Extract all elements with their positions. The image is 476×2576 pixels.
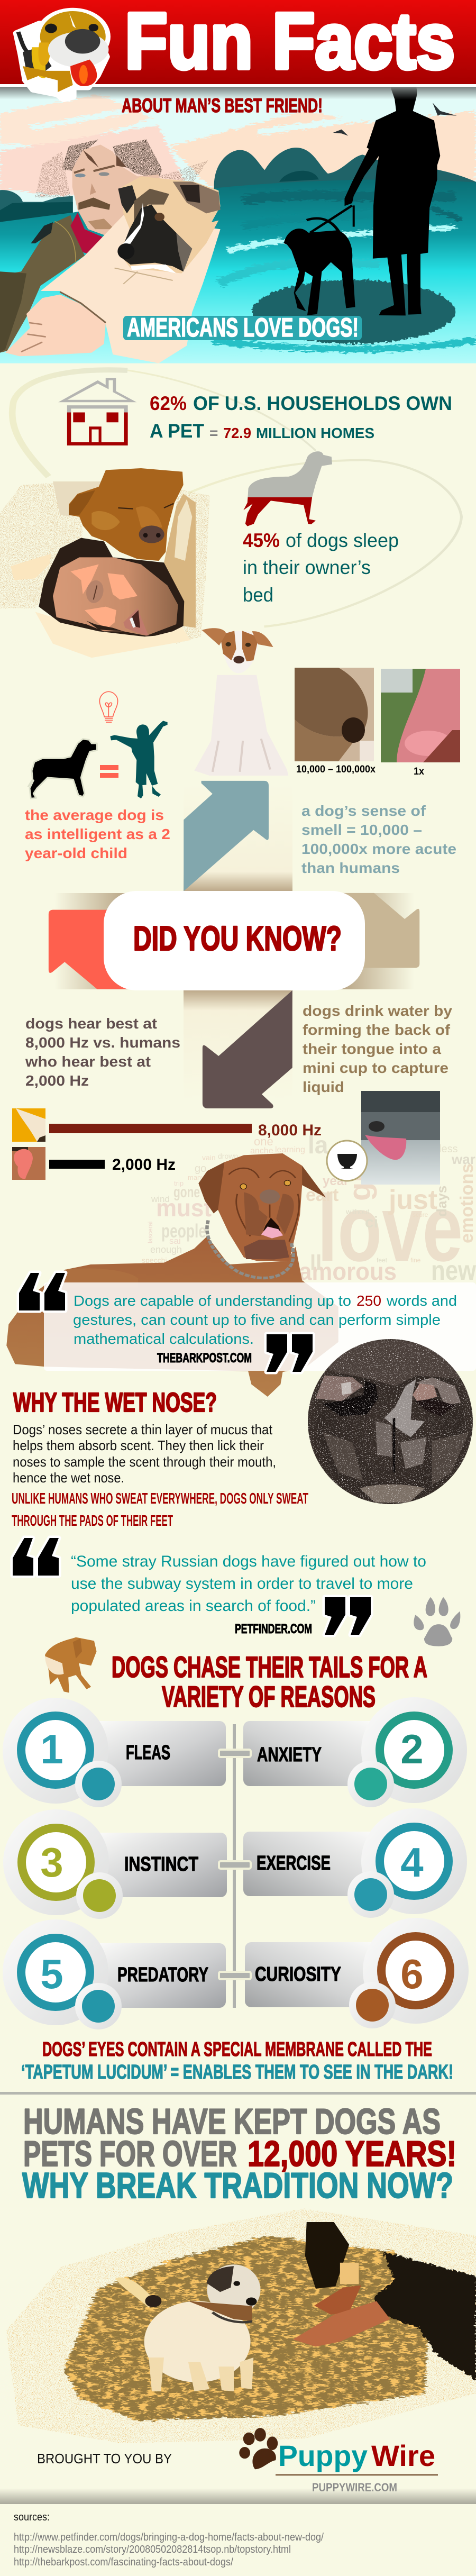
text: drinking fact: their tongue into a (303, 1041, 441, 1057)
icon: ear of dog (12, 1108, 45, 1142)
icon: bowl in circle (327, 1141, 367, 1181)
text: drinking fact: dogs drink water by (303, 1003, 452, 1019)
word cloud background: eart (306, 1185, 338, 1205)
quote text: 250 words: mathematical calculations. (74, 1331, 254, 1347)
bar: dog hearing (49, 1122, 322, 1139)
word cloud background: ll (310, 1251, 322, 1275)
logo outline (17, 11, 107, 99)
face (72, 144, 160, 238)
text: drinking fact (303, 1003, 452, 1095)
icon: house 62 percent (58, 378, 136, 445)
water (0, 179, 476, 363)
text: drinking fact: forming the back of (303, 1022, 451, 1038)
text: smell fact: than humans (301, 860, 400, 876)
heading: 12,000 years (22, 2101, 456, 2206)
word cloud background: year (323, 1174, 349, 1188)
birds (333, 103, 457, 136)
dog head (118, 176, 221, 274)
heading: 12,000 years: PETS FOR OVER (23, 2134, 237, 2174)
word cloud background: drown (218, 1152, 238, 1160)
word cloud background: many (188, 1173, 205, 1181)
source: petfinder: PETFINDER.COM (235, 1622, 312, 1636)
word cloud background: people (161, 1220, 206, 1242)
heading: dogs chase their tails (112, 1650, 427, 1713)
central connector line (233, 1724, 236, 2008)
quote text: 250 words (73, 1292, 457, 1347)
icon: human ear (12, 1147, 45, 1180)
quote text: russian dogs: “Some stray Russian dogs have figured out how to (71, 1553, 426, 1570)
bar: human hearing: 2,000 Hz (112, 1156, 176, 1173)
text: smell fact: smell = 10,000 – (301, 822, 422, 838)
text: drinking fact: mini cup to capture (303, 1060, 448, 1076)
quote text: 250 words: 250 (356, 1292, 381, 1309)
sources: sources: (14, 2511, 50, 2523)
arrow: blue up-right (184, 781, 269, 891)
pillow and sheets (53, 481, 104, 517)
arrow: coral left (49, 910, 131, 989)
photo: dog tongue and bowl (361, 1091, 440, 1185)
text: intelligence fact: year-old child (25, 845, 127, 861)
sleeping dog (69, 468, 184, 561)
reason 2: anxiety (243, 1697, 467, 1807)
text: wet nose explanation: Dogs’ noses secrete a thin layer of mucus that (13, 1422, 273, 1437)
arrow: tan right (334, 893, 419, 968)
white centre pill (104, 891, 365, 990)
word cloud background: fine (410, 1257, 421, 1264)
word cloud background: la (308, 1131, 328, 1159)
text: hearing fact (25, 1015, 180, 1089)
text: sweat fact (12, 1490, 308, 1530)
photo: dogue de bordeaux (6, 1153, 338, 1397)
text: hearing fact: dogs hear best at (25, 1015, 157, 1032)
stat: 45 percent of dogs: bed (243, 584, 273, 606)
shadow ellipse (252, 280, 455, 344)
logo: Puppy Wire: Wire (371, 2439, 435, 2472)
text: intelligence fact: as intelligent as a 2 (25, 826, 170, 842)
heading: why the wet nose: WHY THE WET NOSE? (13, 1387, 217, 1417)
text: smell fact: a dog’s sense of (301, 803, 426, 819)
bedding specks (0, 481, 210, 644)
word cloud background: sai (169, 1236, 181, 1246)
stat: 62 percent of households (150, 393, 452, 442)
did you know graphic (49, 781, 419, 1108)
hero scene (0, 78, 476, 363)
text: wet nose explanation: noses to sample the scent through their mouth, (13, 1454, 276, 1470)
quote text: russian dogs: populated areas in search of food.” (71, 1597, 316, 1615)
caption: human nose: 1x (414, 766, 424, 777)
word cloud background: war (451, 1151, 475, 1167)
cartoon beagle logo (17, 11, 108, 102)
stat: 45 percent of dogs: in their owner’s (243, 557, 371, 578)
footer shadow (0, 2488, 476, 2504)
quote text: 250 words: Dogs are capable of understanding up to (74, 1292, 351, 1309)
icon: light bulb (99, 691, 118, 722)
reason 2: anxiety: 2 (400, 1726, 424, 1772)
man's face (53, 557, 178, 636)
sources: http://newsblaze.com/story/20080502082814tsop.nb/topstory.html (14, 2544, 291, 2555)
reason 6: curiosity: CURIOSITY (255, 1963, 341, 1986)
stat: 62 percent of households: 72.9 (223, 425, 251, 441)
text: smell fact (301, 803, 456, 876)
banner: Americans love dogs: AMERICANS LOVE DOGS! (127, 313, 359, 342)
word cloud background: anche (250, 1146, 273, 1155)
reason 5: predatory: PREDATORY (117, 1964, 208, 1986)
photo: wet dog nose (307, 1339, 474, 1506)
source: thebarkpost: THEBARKPOST.COM (157, 1351, 252, 1366)
text: drinking fact: liquid (303, 1079, 344, 1095)
word cloud background: without (345, 1207, 369, 1216)
sources: http://www.petfinder.com/dogs/bringing-a-dog-home/facts-about-new-dog/ (14, 2532, 324, 2543)
word cloud background: days (434, 1186, 450, 1217)
close quote mark 1 (267, 1334, 313, 1372)
text: intelligence fact (25, 807, 170, 861)
quote text: 250 words: words and (386, 1292, 457, 1309)
reason 3: instinct (3, 1809, 227, 1919)
banner: Americans love dogs (123, 313, 362, 342)
bar: dog hearing: 8,000 Hz (258, 1122, 322, 1139)
text: hearing fact: 2,000 Hz (25, 1072, 89, 1089)
decorative swoosh curves (12, 370, 461, 626)
hand (5, 295, 106, 356)
translucent quote panel (44, 1282, 476, 1371)
dog chest (41, 215, 221, 363)
text: intelligence fact: the average dog is (25, 807, 164, 823)
panel shadows (54, 783, 414, 1102)
stat: 45 percent of dogs: 45% (243, 530, 280, 551)
reason 4: exercise (243, 1808, 467, 1918)
arrow: brown down-left (203, 990, 292, 1108)
text: smell fact: 100,000x more acute (301, 841, 456, 857)
stat: 45 percent of dogs (243, 530, 399, 606)
text: wet nose explanation: hence the wet nose. (13, 1470, 124, 1486)
open quote mark 2 (13, 1538, 59, 1576)
equals sign (100, 765, 118, 778)
stat: 62 percent of households: OF U.S. HOUSEHOLDS OWN (193, 393, 452, 414)
connector bar row 3 (219, 1972, 251, 1979)
reason 1: fleas: 1 (40, 1726, 63, 1772)
photo: alert terrier (194, 628, 288, 776)
open quote mark 1 (19, 1273, 65, 1310)
heading: did you know: DID YOU KNOW? (133, 919, 342, 958)
connector bar row 1 (219, 1750, 251, 1757)
text: hearing fact: 8,000 Hz vs. humans (25, 1034, 180, 1051)
scene painted backdrop (0, 87, 476, 363)
text: hearing fact: who hear best at (25, 1053, 151, 1070)
header band (0, 0, 476, 99)
man's hair (39, 538, 184, 636)
word cloud background: learning (275, 1145, 305, 1154)
outer sand specks (6, 2208, 476, 2443)
reason 6: curiosity (245, 1918, 469, 2028)
reason 1: fleas (3, 1698, 226, 1807)
dog head (198, 1153, 326, 1261)
photo: dog chasing tail (45, 1637, 97, 1693)
dark clothing and hands (293, 2222, 476, 2380)
connector bar row 2 (219, 1861, 251, 1869)
coat (0, 215, 85, 353)
word cloud background: trip (174, 1179, 184, 1187)
subtitle: about man's best friend: ABOUT MAN’S BEST FRIEND! (122, 95, 323, 116)
reason 3: instinct: INSTINCT (124, 1853, 198, 1876)
text: wet nose explanation: helps them absorb scent. They then lick their (13, 1437, 264, 1453)
word cloud background: lascerai (147, 1222, 154, 1243)
word cloud background (142, 1131, 476, 1286)
sources: http://thebarkpost.com/fascinating-facts-about-dogs/ (14, 2556, 233, 2568)
text: tapetum lucidum fact (21, 2038, 453, 2083)
reason 5: predatory: 5 (40, 1951, 63, 1997)
word cloud background: feet (377, 1257, 388, 1264)
close quote mark 2 (325, 1597, 371, 1635)
icon: grey paw (414, 1597, 460, 1646)
logo: Puppy Wire: Puppy (278, 2439, 368, 2472)
reason 4: exercise: 4 (400, 1839, 424, 1886)
word cloud background: score (413, 1211, 428, 1218)
word cloud background: go (195, 1163, 206, 1175)
silhouette: child (110, 721, 168, 798)
silhouette: man and dog on leash (284, 78, 440, 315)
reason 4: exercise: EXERCISE (257, 1852, 331, 1874)
word cloud background: vain (202, 1153, 216, 1162)
word cloud background: one (254, 1135, 273, 1148)
reason 5: predatory (3, 1919, 226, 2029)
quote text: russian dogs (71, 1553, 426, 1615)
word cloud background: just (388, 1185, 437, 1215)
quote text: 250 words: gestures, can count up to five and can perform simple (73, 1312, 441, 1328)
quote text: russian dogs: use the subway system in order to travel to more (71, 1575, 413, 1592)
icon: dog 45 percent (243, 451, 332, 526)
stat: 62 percent of households: MILLION HOMES (256, 425, 374, 441)
spiked collar (207, 1221, 294, 1278)
dog body (6, 1236, 338, 1397)
stat: 45 percent of dogs: of dogs sleep (286, 530, 399, 551)
photo: human nose 1x (381, 669, 460, 762)
word cloud background: must (156, 1194, 212, 1222)
text: wet nose explanation (13, 1422, 276, 1486)
sources (14, 2511, 324, 2568)
silhouette: black dog (28, 739, 97, 798)
word cloud background: specchi (142, 1256, 167, 1264)
dark hair specks (62, 139, 162, 180)
man and dog photo (0, 139, 221, 363)
word cloud background: ci (365, 1214, 378, 1231)
text: sweat fact: THROUGH THE PADS OF THEIR FEET (12, 1513, 173, 1530)
sand (64, 2236, 428, 2420)
reason 1: fleas: FLEAS (126, 1742, 170, 1764)
photo: terrier on the beach (6, 2208, 476, 2443)
word cloud background: wind (151, 1194, 170, 1204)
terrier (115, 2264, 260, 2391)
word cloud background: gone (173, 1184, 200, 1201)
stat: 62 percent of households: 62% (150, 393, 187, 414)
red scarf (70, 213, 109, 254)
reason 3: instinct: 3 (40, 1839, 63, 1886)
word cloud background: amorous (299, 1258, 397, 1285)
hills (214, 148, 476, 213)
logo: Puppy Wire (239, 2428, 438, 2494)
word cloud background: gi (343, 1173, 377, 1201)
photo: man sleeping with dog (0, 468, 210, 658)
bar: human hearing (49, 1156, 176, 1173)
text: brought to you by: BROUGHT TO YOU BY (37, 2451, 172, 2466)
word cloud background: less (439, 1143, 458, 1155)
logo: Puppy Wire: PUPPYWIRE.COM (312, 2481, 397, 2494)
reason 2: anxiety: ANXIETY (257, 1744, 322, 1766)
stat: 62 percent of households: A PET (150, 420, 204, 442)
caption: dog nose: 10,000 – 100,000x (296, 764, 376, 775)
reason 6: curiosity: 6 (400, 1951, 424, 1997)
photo: dog nose 10,000x (295, 668, 374, 761)
paw mark (239, 2428, 278, 2469)
stat: 62 percent of households: = (209, 425, 218, 441)
word cloud background: enough (150, 1244, 182, 1255)
